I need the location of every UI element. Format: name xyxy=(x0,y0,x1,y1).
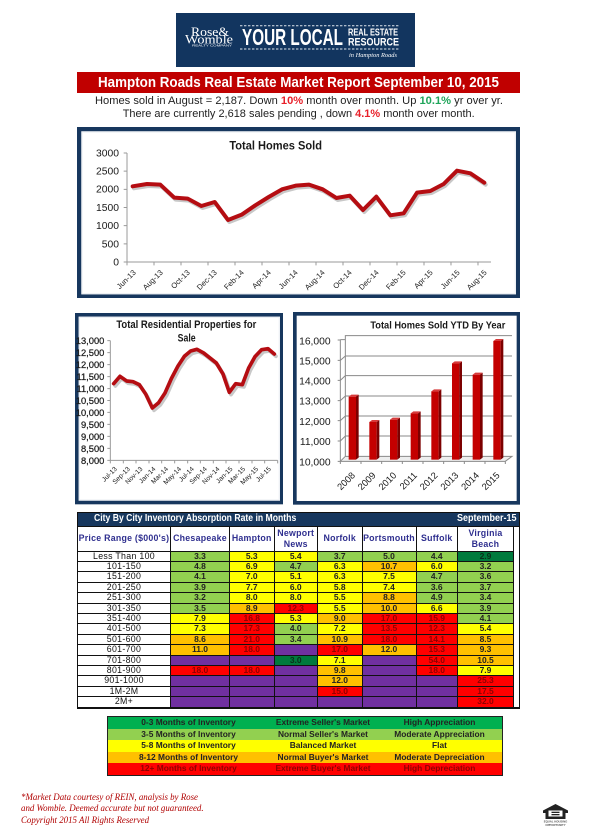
panel: total homes sold line chart xyxy=(77,127,520,298)
table grid: Newport xyxy=(277,528,314,538)
icon: equal housing opportunity xyxy=(543,804,568,827)
panel: total homes sold line chart: 3000 xyxy=(96,148,119,159)
panel: total residential properties for sale line chart: Total Residential Properties for xyxy=(116,319,257,331)
logo banner: REALTY COMPANY xyxy=(192,44,232,48)
panel: total homes sold line chart: Feb-15 xyxy=(384,268,407,291)
summary text xyxy=(95,95,503,120)
panel: total residential properties for sale line chart: 10,500 xyxy=(75,396,104,406)
panel: total homes sold YTD by year bar chart: 2008 xyxy=(335,471,357,492)
panel: total residential properties for sale line chart: Sep-14 xyxy=(188,466,209,486)
legend: market conditions: Moderate Depreciation xyxy=(394,752,485,762)
legend: market conditions: 12+ Months of Inventory xyxy=(140,763,237,773)
panel: total homes sold line chart: Jun-14 xyxy=(276,267,300,291)
panel: total homes sold line chart: 1500 xyxy=(96,203,119,214)
panel: total residential properties for sale line chart: 9,000 xyxy=(81,432,104,442)
panel: total residential properties for sale line chart: May-15 xyxy=(239,466,260,487)
panel: total residential properties for sale line chart: Nov-14 xyxy=(201,466,221,486)
panel: total residential properties for sale line chart: May-14 xyxy=(162,466,183,487)
legend: market conditions: Flat xyxy=(432,740,447,750)
panel: total homes sold line chart: 0 xyxy=(113,257,119,268)
table grid xyxy=(78,527,513,707)
table grid: Hampton xyxy=(232,533,272,543)
panel: total homes sold line chart: Oct-14 xyxy=(331,267,354,290)
panel: total homes sold line chart: Jun-13 xyxy=(114,268,137,291)
panel: total homes sold YTD by year bar chart: 2015 xyxy=(480,471,501,492)
summary text: Homes sold in August = 2,187. Down 10% month over month. Up 10.1% yr over yr. xyxy=(95,95,503,107)
panel: total homes sold line chart: 1000 xyxy=(96,221,119,232)
footer disclaimer: Copyright 2015 All Rights Reserved xyxy=(21,814,149,824)
table heading band: City By City Inventory Absorption Rate in Months xyxy=(94,513,296,524)
panel: total homes sold YTD by year bar chart: Total Homes Sold YTD By Year xyxy=(370,321,505,332)
panel: total homes sold YTD by year bar chart: 15,000 xyxy=(299,357,331,368)
panel: total residential properties for sale line chart: Mar-15 xyxy=(227,466,247,486)
title band: Hampton Roads Real Estate Market Report September 10, 2015 xyxy=(98,75,499,91)
panel: total residential properties for sale line chart xyxy=(75,313,283,504)
panel: total homes sold YTD by year bar chart: 2012 xyxy=(418,471,439,492)
panel: total homes sold YTD by year bar chart: 2010 xyxy=(376,471,398,492)
panel: total residential properties for sale line chart: 12,500 xyxy=(75,348,104,358)
footer disclaimer: *Market Data courtesy of REIN, analysis by Rose xyxy=(21,792,198,802)
panel: total homes sold line chart: Aug-15 xyxy=(465,268,488,292)
panel: total residential properties for sale line chart: 13,000 xyxy=(75,336,104,346)
legend: market conditions: 8-12 Months of Inventory xyxy=(139,752,238,762)
table grid: Price Range ($000's) xyxy=(79,533,169,543)
panel: total residential properties for sale line chart: 11,500 xyxy=(76,372,104,382)
footer disclaimer xyxy=(21,792,204,825)
legend: market conditions: 3-5 Months of Inventory xyxy=(141,729,236,739)
logo banner: Womble xyxy=(185,32,234,46)
panel: total homes sold line chart: Dec-14 xyxy=(357,267,381,292)
legend: market conditions: Normal Seller's Market xyxy=(278,729,368,739)
panel: total homes sold line chart: Apr-15 xyxy=(412,268,434,290)
panel: total homes sold YTD by year bar chart: 13,000 xyxy=(299,397,331,408)
logo banner: YOUR LOCAL xyxy=(242,24,343,50)
legend: market conditions: Balanced Market xyxy=(290,740,356,750)
legend: market conditions: 0-3 Months of Inventory xyxy=(141,717,236,727)
legend: market conditions: High Appreciation xyxy=(404,717,475,727)
panel: total homes sold line chart: 2000 xyxy=(96,184,119,195)
table heading band: September-15 xyxy=(457,513,517,524)
legend: market conditions: Normal Buyer's Market xyxy=(278,752,368,762)
panel: total residential properties for sale line chart: 8,000 xyxy=(81,456,104,466)
legend: market conditions: Moderate Appreciation xyxy=(394,729,485,739)
panel: total homes sold line chart: Aug-14 xyxy=(303,267,327,292)
panel: city by city inventory absorption table xyxy=(76,512,520,709)
panel: total residential properties for sale line chart: Sep-13 xyxy=(111,466,132,486)
panel: total homes sold line chart: Jun-15 xyxy=(438,268,461,291)
panel: total residential properties for sale line chart: Mar-14 xyxy=(150,466,170,486)
panel: total residential properties for sale line chart: 9,500 xyxy=(81,420,104,430)
panel: total homes sold YTD by year bar chart xyxy=(293,312,520,505)
panel: total homes sold YTD by year bar chart: 12,000 xyxy=(299,417,331,428)
panel: total homes sold line chart: 500 xyxy=(101,239,119,250)
table grid: Portsmouth xyxy=(363,533,415,543)
panel: total residential properties for sale line chart: 11,000 xyxy=(76,384,104,394)
table grid: Norfolk xyxy=(323,533,356,543)
panel: total residential properties for sale line chart: Jul-13 xyxy=(101,466,119,484)
table heading band xyxy=(78,513,518,526)
table grid: Chesapeake xyxy=(173,533,227,543)
panel: total homes sold YTD by year bar chart: 16,000 xyxy=(299,337,331,348)
panel: total residential properties for sale line chart: Jan-15 xyxy=(215,466,234,485)
legend: market conditions: Extreme Buyer's Market xyxy=(275,763,371,773)
panel: total homes sold line chart: 2500 xyxy=(96,166,119,177)
panel: total homes sold line chart: Total Homes Sold xyxy=(229,138,322,152)
table grid: News xyxy=(284,539,308,549)
panel: total homes sold YTD by year bar chart: 2014 xyxy=(459,471,481,492)
logo banner xyxy=(176,13,415,67)
icon: equal housing opportunity: OPPORTUNITY xyxy=(545,823,566,827)
legend: market conditions xyxy=(107,716,503,776)
panel: total homes sold line chart: Feb-14 xyxy=(222,267,246,291)
panel: total residential properties for sale line chart: Jan-14 xyxy=(138,466,157,485)
logo banner: Rose& xyxy=(191,25,229,39)
panel: total homes sold line chart: Apr-14 xyxy=(250,267,273,290)
table grid: Suffolk xyxy=(421,533,453,543)
panel: total homes sold YTD by year bar chart: 2011 xyxy=(397,471,419,492)
panel: total homes sold YTD by year bar chart: 14,000 xyxy=(299,377,331,388)
panel: total residential properties for sale line chart: Nov-13 xyxy=(124,466,144,486)
panel: total residential properties for sale line chart: Jul-14 xyxy=(178,466,196,484)
panel: total homes sold YTD by year bar chart: 2013 xyxy=(438,471,460,492)
table grid: Beach xyxy=(472,539,499,549)
footer disclaimer: and Womble. Deemed accurate but not guaranteed. xyxy=(21,803,204,813)
legend: market conditions: Extreme Seller's Market xyxy=(276,717,370,727)
logo banner: REAL ESTATE xyxy=(348,28,398,38)
legend: market conditions: 5-8 Months of Inventory xyxy=(141,740,236,750)
panel: total residential properties for sale line chart: Jul-15 xyxy=(255,466,273,484)
panel: total homes sold YTD by year bar chart: 11,000 xyxy=(299,437,331,448)
panel: total homes sold YTD by year bar chart: 2009 xyxy=(356,471,377,492)
table grid: Virginia xyxy=(468,528,503,538)
logo banner: RESOURCE xyxy=(348,36,399,48)
panel: total homes sold line chart: Dec-13 xyxy=(195,268,218,292)
panel: total homes sold YTD by year bar chart: 10,000 xyxy=(299,458,331,469)
panel: total homes sold line chart: Aug-13 xyxy=(141,268,164,292)
panel: total residential properties for sale line chart: 12,000 xyxy=(75,360,104,370)
logo banner: in Hampton Roads xyxy=(349,52,397,59)
icon: equal housing opportunity: EQUAL HOUSING xyxy=(544,820,567,824)
panel: total residential properties for sale line chart: Sale xyxy=(177,333,195,345)
panel: total residential properties for sale line chart: 10,000 xyxy=(75,408,104,418)
panel: total homes sold line chart: Oct-13 xyxy=(169,268,191,290)
panel: total residential properties for sale line chart: 8,500 xyxy=(81,444,104,454)
legend: market conditions: High Depreciation xyxy=(404,763,475,773)
summary text: There are currently 2,618 sales pending , down 4.1% month over month. xyxy=(123,108,475,120)
